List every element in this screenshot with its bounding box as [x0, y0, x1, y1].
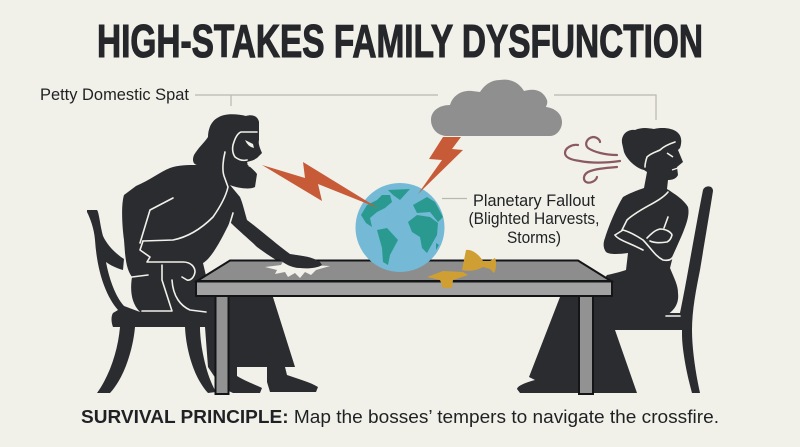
table left leg	[216, 296, 228, 394]
survival principle: SURVIVAL PRINCIPLE: Map the bosses’ tempers to navigate the crossfire.	[81, 407, 719, 427]
storm cloud	[431, 80, 562, 136]
label: planetary fallout: Planetary Fallout	[473, 191, 595, 210]
label: planetary fallout: (Blighted Harvests,	[468, 209, 600, 228]
hera chair	[615, 186, 713, 393]
table front edge	[196, 282, 612, 296]
table top	[197, 260, 611, 281]
zeus chair	[87, 210, 216, 393]
globe	[356, 183, 444, 272]
icon: wind huff	[565, 137, 620, 183]
table right leg	[579, 296, 593, 394]
zeus teeth	[247, 160, 255, 167]
label: planetary fallout: Storms)	[507, 228, 561, 247]
leader line: spat	[195, 95, 438, 106]
continents	[361, 189, 443, 265]
zeus robe sliver	[200, 328, 205, 348]
label: planetary fallout	[468, 191, 600, 247]
lightning: zeus to globe	[262, 162, 378, 208]
hera eye	[667, 153, 673, 157]
lightning: cloud to globe	[418, 137, 463, 194]
leader line: fallout	[442, 198, 467, 200]
spilled goblet	[427, 250, 496, 288]
zeus figure	[122, 114, 322, 393]
zeus lower robe and feet	[198, 294, 318, 393]
leader line: cloud to woman	[554, 95, 656, 120]
hera mouth	[672, 168, 678, 170]
zeus hand on table	[278, 254, 322, 268]
label: petty domestic spat: Petty Domestic Spat	[40, 85, 189, 104]
impact crack	[265, 260, 330, 278]
hera figure	[517, 128, 689, 393]
table	[196, 260, 612, 394]
zeus white robe lines	[132, 132, 257, 312]
hera white lines	[615, 142, 683, 316]
zeus eye	[245, 140, 254, 148]
